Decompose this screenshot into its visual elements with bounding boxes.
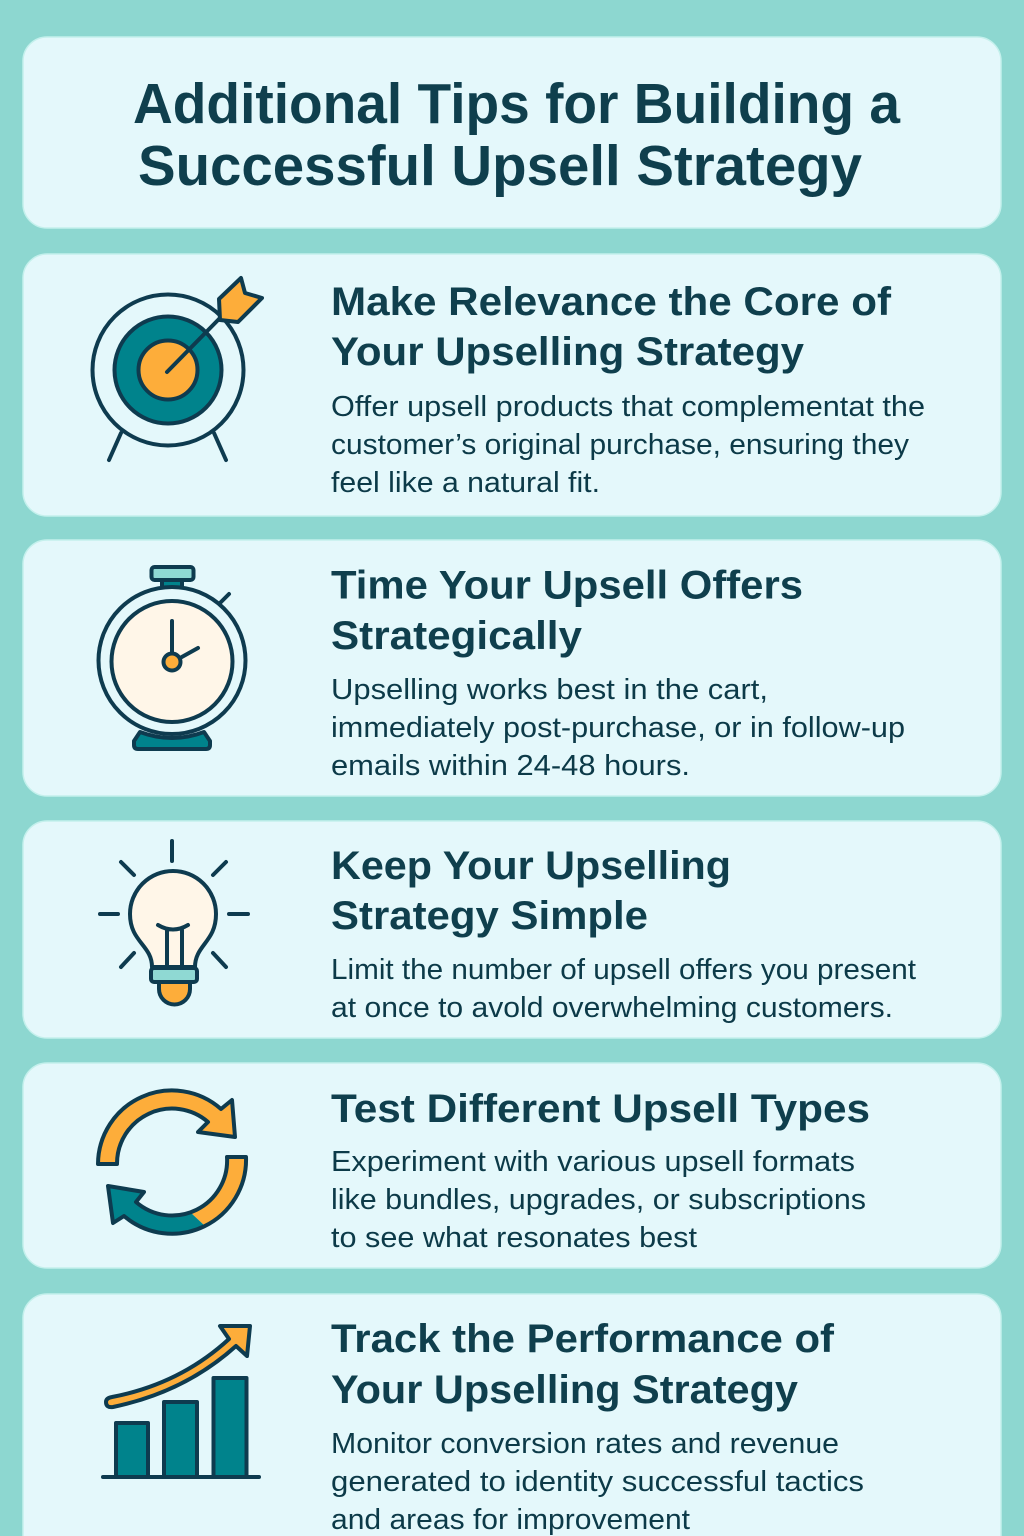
panel: simplicity tip: [23, 821, 1001, 1038]
heading: relevance: Your Upselling Strategy: [331, 330, 805, 374]
icon: rising bar chart: [103, 1326, 259, 1477]
text: relevance description: customer’s original purchase, ensuring they: [331, 429, 910, 461]
panel: title: [23, 37, 1001, 228]
text: testing description: like bundles, upgrades, or subscriptions: [331, 1184, 866, 1216]
text: simplicity description: at once to avold overwhelming customers.: [331, 992, 893, 1024]
icon: light bulb: [100, 841, 248, 1004]
text: testing description: [331, 1146, 866, 1254]
heading: simplicity: Strategy Simple: [331, 894, 648, 938]
text: timing description: immediately post-purchase, or in follow-up: [331, 712, 905, 744]
text: timing description: emails within 24-48 hours.: [331, 750, 690, 782]
text: tracking description: generated to identity successful tactics: [331, 1466, 864, 1498]
heading: timing: Time Your Upsell Offers: [331, 564, 803, 608]
text: relevance description: Offer upsell products that complementat the: [331, 391, 925, 423]
heading: timing: [331, 564, 803, 658]
heading: simplicity: [331, 844, 731, 938]
text: relevance description: [331, 391, 925, 499]
heading: testing: Test Different Upsell Types: [331, 1087, 870, 1131]
text: relevance description: feel like a natural fit.: [331, 467, 600, 499]
title: [133, 72, 901, 198]
text: timing description: [331, 674, 905, 782]
icon: stopwatch: [98, 567, 246, 749]
text: tracking description: [331, 1428, 864, 1536]
panel: relevance tip: [23, 254, 1001, 516]
text: simplicity description: Limit the number of upsell offers you present: [331, 954, 916, 986]
heading: tracking: Your Upselling Strategy: [331, 1368, 799, 1412]
title: Additional Tips for Building a: [133, 72, 901, 136]
icon: target with arrow: [92, 278, 262, 460]
panel: testing tip: [23, 1063, 1001, 1268]
text: testing description: Experiment with various upsell formats: [331, 1146, 855, 1178]
text: simplicity description: [331, 954, 916, 1024]
heading: timing: Strategically: [331, 614, 583, 658]
heading: tracking: [331, 1317, 835, 1412]
panel: timing tip: [23, 540, 1001, 796]
panel: tracking tip: [23, 1294, 1001, 1536]
text: tracking description: and areas for improvement: [331, 1504, 690, 1536]
heading: relevance: Make Relevance the Core of: [331, 280, 892, 324]
text: tracking description: Monitor conversion rates and revenue: [331, 1428, 839, 1460]
heading: tracking: Track the Performance of: [331, 1317, 835, 1361]
text: testing description: to see what resonates best: [331, 1222, 697, 1254]
text: timing description: Upselling works best in the cart,: [331, 674, 768, 706]
title: Successful Upsell Strategy: [138, 134, 862, 198]
icon: cycle arrows: [98, 1090, 246, 1234]
heading: simplicity: Keep Your Upselling: [331, 844, 731, 888]
heading: relevance: [331, 280, 892, 374]
